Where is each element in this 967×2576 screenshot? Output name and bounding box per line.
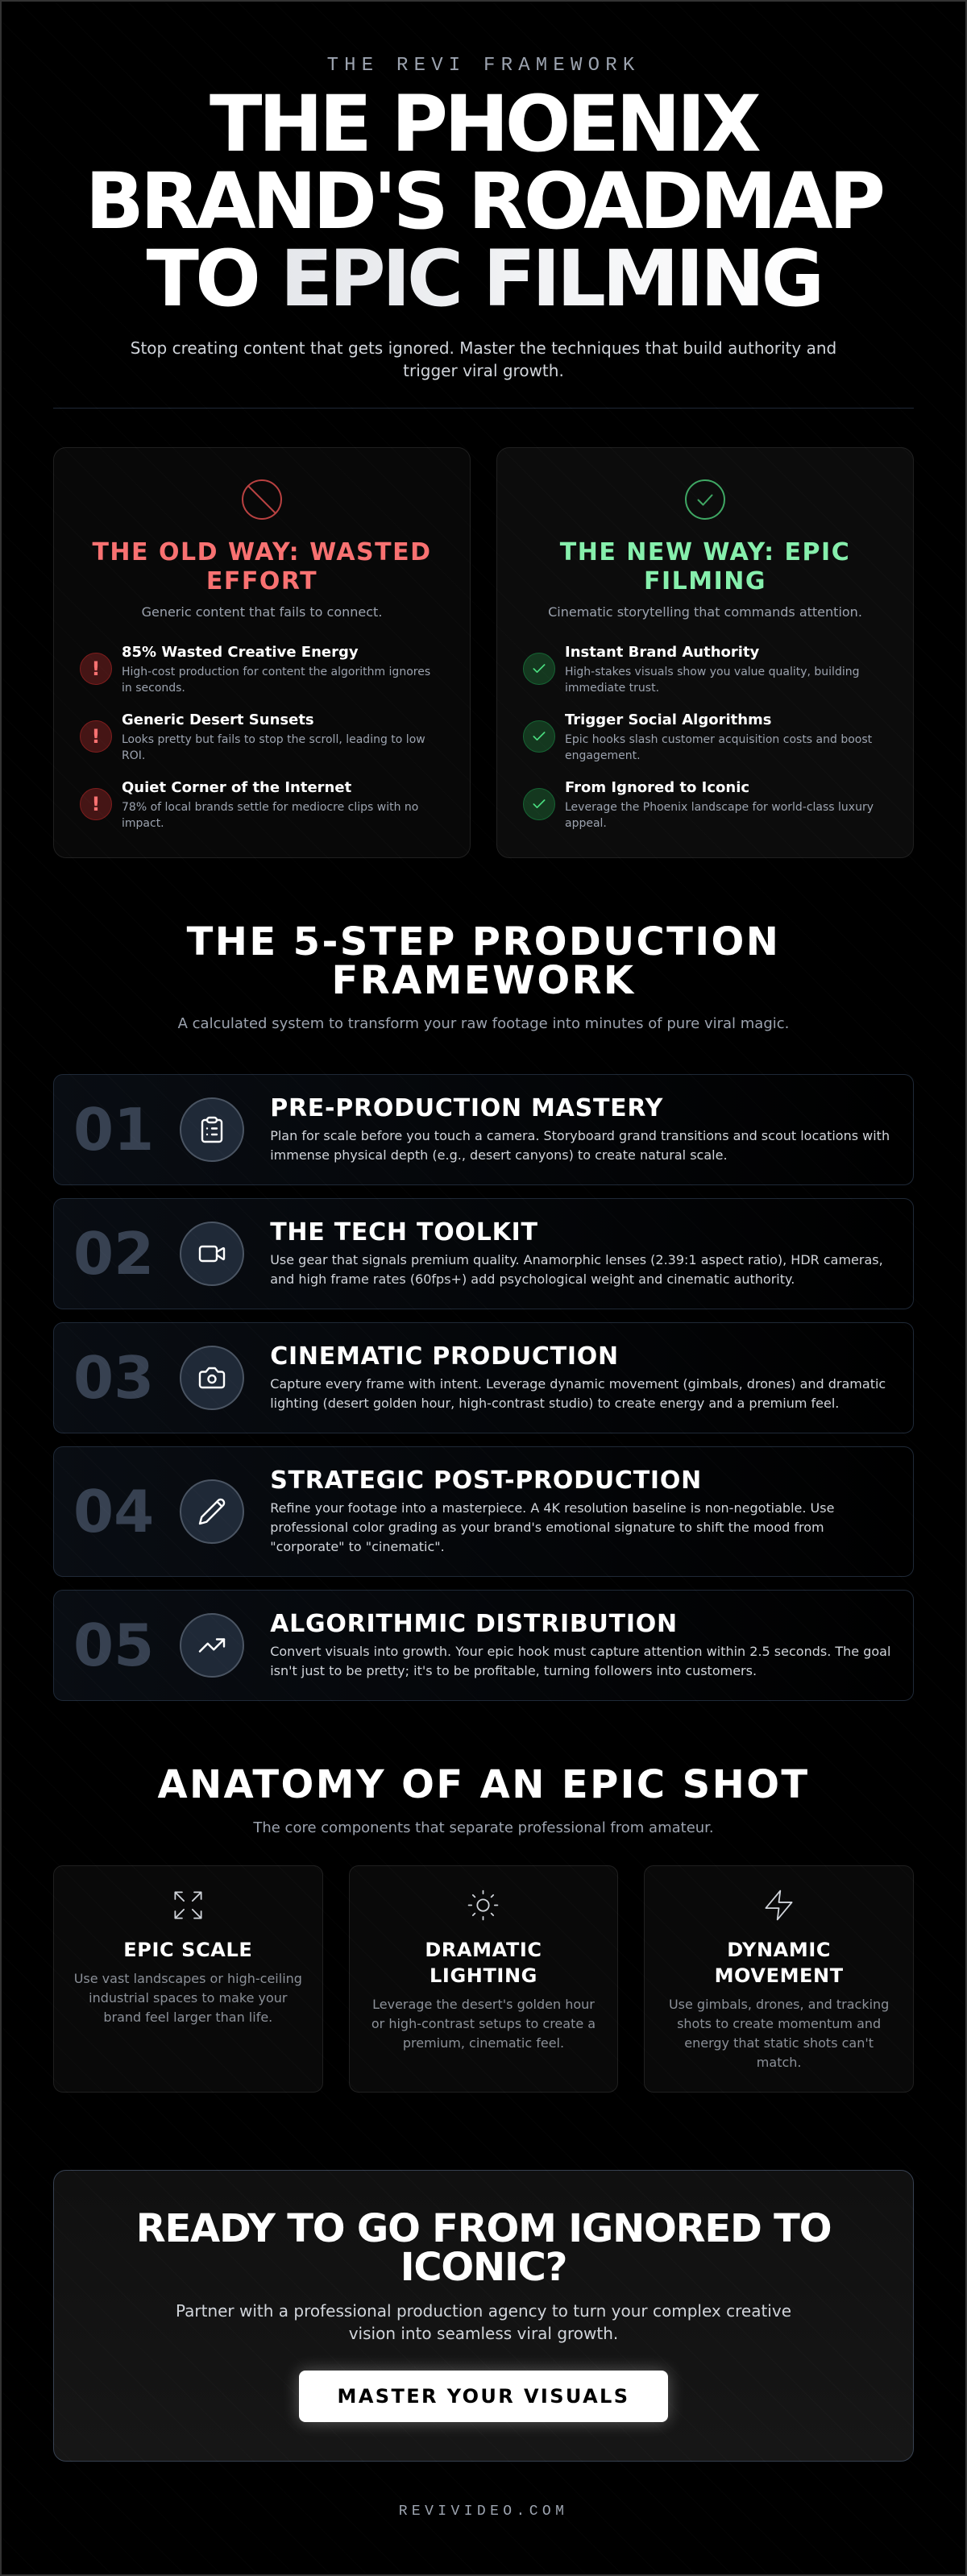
text: epic scale description: brand feel larger than life.: [103, 2010, 272, 2025]
text: dramatic lighting description: Leverage the desert's golden hour: [372, 1997, 595, 2012]
step 01: pre-production mastery: immense physical depth (e.g., desert canyons) to create natural scale.: [270, 1147, 728, 1163]
step 03: cinematic production: lighting (desert golden hour, high-contrast studio) to create energy and a premium feel.: [270, 1396, 839, 1411]
step 02: the tech toolkit: and high frame rates (60fps+) add psychological weight and cinematic authority.: [270, 1271, 795, 1287]
subtitle: Stop creating content that gets ignored. Master the techniques that build authority and: [131, 338, 836, 358]
list item: 85% wasted creative energy: High-cost production for content the algorithm ignores: [122, 666, 430, 678]
list item: 85% wasted creative energy: 85% Wasted Creative Energy: [122, 644, 359, 661]
list item: quiet corner of the internet: [80, 779, 418, 830]
list item: instant brand authority: [523, 644, 859, 695]
subtitle: [131, 338, 836, 380]
title: BRAND'S ROADMAP: [85, 156, 882, 247]
list item: generic desert sunsets: [80, 711, 425, 762]
heading: dramatic lighting: DRAMATIC: [425, 1939, 542, 1961]
heading: 5-step production framework: FRAMEWORK: [332, 958, 635, 1003]
title: TO EPIC FILMING: [147, 234, 820, 324]
text: call to action description: Partner with a professional production agency to turn your complex creative: [176, 2301, 791, 2321]
step 05: algorithmic distribution: 05: [73, 1612, 154, 1679]
heading: dynamic movement: MOVEMENT: [715, 1964, 844, 1987]
heading: new way: FILMING: [644, 567, 766, 595]
heading: call to action: ICONIC?: [400, 2245, 567, 2290]
list item: quiet corner of the internet: 78% of local brands settle for mediocre clips with no: [122, 801, 418, 814]
step 01: pre-production mastery: 01: [73, 1096, 154, 1164]
heading: call to action: READY TO GO FROM IGNORED TO: [136, 2206, 831, 2251]
step 04: strategic post-production: [53, 1446, 914, 1577]
text: old way subtitle: Generic content that fails to connect.: [142, 604, 382, 620]
panel: epic scale: [53, 1865, 323, 2093]
step 02: the tech toolkit: Use gear that signals premium quality. Anamorphic lenses (2.39:1 aspect ratio), HDR cameras,: [270, 1252, 883, 1267]
heading: dramatic lighting: [425, 1939, 542, 1987]
step 02: the tech toolkit: [53, 1198, 914, 1309]
list item: 85% wasted creative energy: [80, 644, 430, 695]
icon: sun: [467, 1890, 498, 1921]
list item: from ignored to iconic: Leverage the Phoenix landscape for world-class luxury: [565, 801, 874, 814]
heading: new way: THE NEW WAY: EPIC: [560, 538, 850, 566]
list item: quiet corner of the internet: !: [92, 793, 100, 815]
heading: old way: EFFORT: [206, 567, 317, 595]
list item: generic desert sunsets: !: [92, 725, 100, 748]
text: epic scale description: [74, 1971, 302, 2025]
panel: the old way: [53, 447, 471, 858]
text: call to action description: vision into seamless viral growth.: [349, 2324, 618, 2343]
footer: revivideo.com: REVIVIDEO.COM: [399, 2503, 568, 2520]
heading: old way: THE OLD WAY: WASTED: [92, 538, 432, 566]
eyebrow: the revi framework: THE REVI FRAMEWORK: [327, 55, 640, 77]
text: call to action description: [176, 2301, 791, 2343]
panel: call to action: [53, 2170, 914, 2462]
text: dynamic movement description: energy that static shots can't: [684, 2035, 874, 2051]
heading: epic scale: EPIC SCALE: [123, 1939, 252, 1961]
heading: dramatic lighting: LIGHTING: [430, 1964, 537, 1987]
list item: trigger social algorithms: Epic hooks slash customer acquisition costs and boost: [565, 733, 872, 746]
text: dynamic movement description: [669, 1997, 889, 2070]
step 04: strategic post-production: professional color grading as your brand's emotional signature to shift the mood from: [270, 1520, 824, 1535]
subtitle: trigger viral growth.: [403, 361, 564, 380]
heading: call to action: [136, 2206, 831, 2290]
list item: from ignored to iconic: From Ignored to Iconic: [565, 779, 749, 796]
text: epic scale description: industrial spaces to make your: [89, 1990, 287, 2006]
panel: dynamic movement: [644, 1865, 914, 2093]
step 03: cinematic production: [53, 1322, 914, 1433]
step 05: algorithmic distribution: isn't just to be pretty; it's to be profitable, turning followers into customers.: [270, 1663, 757, 1678]
list item: 85% wasted creative energy: !: [92, 657, 100, 680]
step 02: the tech toolkit: 02: [73, 1220, 154, 1288]
icon: lightning bolt: [766, 1890, 793, 1921]
step 05: algorithmic distribution: ALGORITHMIC DISTRIBUTION: [270, 1610, 678, 1638]
step 01: pre-production mastery: Plan for scale before you touch a camera. Storyboard grand transitions and scout locations with: [270, 1128, 890, 1143]
list item: quiet corner of the internet: impact.: [122, 817, 164, 830]
text: dynamic movement description: Use gimbals, drones, and tracking: [669, 1997, 889, 2012]
button: master your visuals: MASTER YOUR VISUALS: [338, 2385, 629, 2408]
heading: dynamic movement: DYNAMIC: [727, 1939, 831, 1961]
step 05: algorithmic distribution: [53, 1590, 914, 1701]
text: anatomy subtitle: The core components that separate professional from amateur.: [253, 1819, 714, 1836]
step 04: strategic post-production: 04: [73, 1478, 154, 1545]
list item: instant brand authority: Instant Brand Authority: [565, 644, 759, 661]
list: old way points: [80, 644, 430, 830]
text: dramatic lighting description: [371, 1997, 596, 2051]
step 04: strategic post-production: "corporate" to "cinematic".: [270, 1539, 445, 1554]
list item: instant brand authority: immediate trust.: [565, 682, 659, 695]
list item: trigger social algorithms: Trigger Social Algorithms: [565, 711, 772, 728]
heading: anatomy of an epic shot: ANATOMY OF AN EPIC SHOT: [157, 1762, 810, 1807]
button: master your visuals: [299, 2371, 668, 2422]
list item: quiet corner of the internet: Quiet Corner of the Internet: [122, 779, 351, 796]
icon: ban circle: [242, 479, 282, 520]
text: epic scale description: Use vast landscapes or high-ceiling: [74, 1971, 302, 1986]
step 03: cinematic production: CINEMATIC PRODUCTION: [270, 1342, 619, 1371]
heading: 5-step production framework: [187, 919, 780, 1003]
text: dynamic movement description: shots to create momentum and: [677, 2016, 881, 2031]
step 02: the tech toolkit: THE TECH TOOLKIT: [270, 1218, 538, 1247]
list item: trigger social algorithms: engagement.: [565, 749, 641, 762]
icon: expand arrows: [174, 1891, 201, 1919]
title: [85, 79, 883, 324]
step 04: strategic post-production: Refine your footage into a masterpiece. A 4K resolution baseline is non-negotiable. Use: [270, 1500, 834, 1516]
panel: the new way: [496, 447, 914, 858]
step 05: algorithmic distribution: Convert visuals into growth. Your epic hook must capture attention within 2.5 seconds. The goal: [270, 1644, 890, 1659]
text: dynamic movement description: match.: [757, 2055, 801, 2070]
step 04: strategic post-production: STRATEGIC POST-PRODUCTION: [270, 1466, 702, 1495]
list: new way points: [523, 644, 874, 830]
section: five steps: [53, 1074, 914, 1701]
list item: generic desert sunsets: ROI.: [122, 749, 145, 762]
step 01: pre-production mastery: [53, 1074, 914, 1185]
list item: generic desert sunsets: Looks pretty but fails to stop the scroll, leading to low: [122, 733, 425, 746]
text: new way subtitle: Cinematic storytelling that commands attention.: [548, 604, 862, 620]
text: dramatic lighting description: or high-contrast setups to create a: [371, 2016, 596, 2031]
list item: from ignored to iconic: [523, 779, 874, 830]
text: framework subtitle: A calculated system to transform your raw footage into minutes of pure viral magic.: [178, 1015, 789, 1032]
step 01: pre-production mastery: PRE-PRODUCTION MASTERY: [270, 1094, 663, 1122]
section: anatomy cards: [53, 1865, 914, 2093]
title: THE PHOENIX: [210, 79, 757, 169]
step 03: cinematic production: 03: [73, 1344, 154, 1412]
list item: trigger social algorithms: [523, 711, 872, 762]
heading: 5-step production framework: THE 5-STEP PRODUCTION: [187, 919, 780, 964]
heading: dynamic movement: [715, 1939, 844, 1987]
list item: generic desert sunsets: Generic Desert Sunsets: [122, 711, 314, 728]
list item: instant brand authority: High-stakes visuals show you value quality, building: [565, 666, 859, 678]
list item: 85% wasted creative energy: in seconds.: [122, 682, 185, 695]
heading: old way: [92, 538, 432, 595]
heading: new way: [559, 538, 850, 595]
list item: from ignored to iconic: appeal.: [565, 817, 607, 830]
section: old way vs new way comparison: [53, 447, 914, 858]
panel: dramatic lighting: [349, 1865, 618, 2093]
step 03: cinematic production: Capture every frame with intent. Leverage dynamic movement (gimbals, drones) and dramatic: [270, 1376, 886, 1392]
icon: check circle: [685, 479, 725, 520]
text: dramatic lighting description: premium, cinematic feel.: [403, 2035, 564, 2051]
